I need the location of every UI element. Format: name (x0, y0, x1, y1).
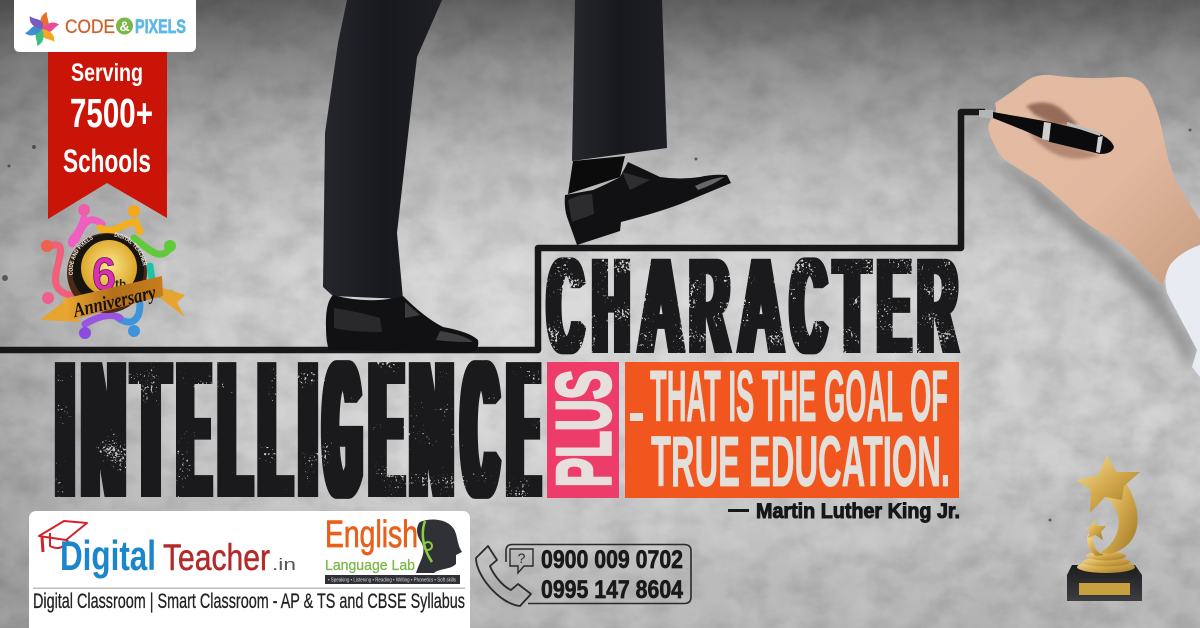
trophy base (1067, 565, 1142, 601)
wordmark Language Lab: Language Lab (325, 557, 415, 574)
hand holding pen (979, 75, 1200, 377)
numeral 6th: 6 (92, 248, 116, 300)
hand-drawn staircase line (0, 112, 985, 350)
ribbon: Serving 7500+ Schools: 7500+ (70, 90, 153, 136)
right shoe (565, 162, 731, 245)
figure heads (41, 204, 176, 339)
logo card: Code & Pixels (14, 0, 196, 52)
panel: PLUS pink block (542, 362, 627, 498)
wordmark Teacher: Teacher (163, 537, 270, 578)
gold banner (40, 288, 185, 322)
medallion (67, 233, 147, 313)
heading: CHARACTER: C (791, 230, 826, 383)
heading: CHARACTER: C (548, 230, 583, 383)
ampersand: & (119, 18, 130, 34)
businessman legs climbing the steps (323, 0, 731, 353)
right sock (568, 156, 625, 194)
big star (1076, 455, 1140, 513)
heading: INTELLIGENCE: I (300, 320, 316, 539)
trophy (1067, 455, 1142, 601)
heading: INTELLIGENCE: L (260, 320, 290, 539)
right trouser leg (572, 0, 667, 161)
numeral 6th: th (115, 277, 126, 291)
text: R (918, 230, 957, 383)
brand word PIXELS: PIXELS (135, 17, 186, 38)
icon: graduation cap (39, 521, 87, 552)
shirt cuff (1166, 245, 1200, 377)
icon: head with headset (416, 520, 462, 573)
badge: 6th anniversary (40, 204, 185, 339)
ring labels: DIGITAL TEACHER (114, 232, 147, 266)
heading: CHARACTER: H (593, 230, 629, 383)
panel: PLUS pink block: PLUS (542, 370, 627, 487)
heading: INTELLIGENCE: N (411, 320, 452, 539)
skills strip: • Speaking • Listening • Reading • Writing • Phonetics • Soft skills (328, 578, 456, 584)
pen (979, 110, 1114, 154)
pinwheel icon (24, 12, 60, 46)
ring labels: CODE AND PIXELS (68, 236, 93, 275)
divider (33, 588, 465, 589)
wordmark .in: .in (272, 555, 296, 574)
heading: CHARACTER: T (835, 230, 869, 383)
attribution: Martin Luther King Jr. (756, 500, 960, 523)
pedestal (1077, 552, 1135, 573)
heading: INTELLIGENCE: C (463, 320, 497, 539)
figure arms (50, 218, 170, 324)
text: E (509, 320, 538, 539)
small star (1085, 520, 1106, 540)
brand word CODE: CODE (65, 17, 115, 38)
icon: phone handset (476, 546, 531, 606)
heading: INTELLIGENCE: I (57, 320, 73, 539)
number box (512, 544, 691, 604)
heading: CHARACTER: A (739, 230, 783, 383)
heading: INTELLIGENCE: E (371, 320, 402, 539)
name plate (1079, 583, 1130, 595)
panel: orange quote block (625, 357, 959, 498)
heading: INTELLIGENCE (57, 320, 538, 539)
wordmark English: English (325, 514, 418, 556)
ribbon: Serving 7500+ Schools: Schools (63, 143, 151, 179)
tagline: Digital Classroom | Smart Classroom - AP & TS and CBSE Syllabus (33, 590, 465, 613)
banner text: Anniversary (70, 282, 158, 322)
ribbon: Serving 7500+ Schools: Serving (71, 59, 143, 87)
icon: question bubble: ? (518, 550, 526, 566)
ampersand (116, 18, 133, 34)
ribbon: Serving 7500+ Schools (48, 52, 167, 219)
heading: INTELLIGENCE: L (220, 320, 250, 539)
heading: CHARACTER: A (639, 230, 683, 383)
left trouser leg (323, 0, 442, 299)
panel: Digital Teacher and English Language Lab card (29, 511, 470, 628)
heading: CHARACTER (548, 230, 957, 383)
ring labels (68, 232, 147, 275)
heading: INTELLIGENCE: E (179, 320, 209, 539)
phone number 2: 0995 147 8604 (541, 576, 683, 604)
hand (988, 75, 1200, 285)
heading: CHARACTER: E (878, 230, 910, 383)
heading: INTELLIGENCE: T (134, 320, 168, 539)
hand shadow on wall (1000, 160, 1195, 372)
swoosh (1100, 476, 1138, 554)
phone number 1: 0900 009 0702 (541, 546, 683, 574)
dash mark (630, 413, 643, 421)
wordmark Digital: Digital (60, 532, 156, 579)
heading: CHARACTER: R (690, 230, 729, 383)
heading: INTELLIGENCE: N (83, 320, 124, 539)
skills strip (325, 575, 460, 584)
contact phone numbers (476, 544, 691, 606)
icon: question bubble (510, 549, 533, 573)
left shoe (326, 295, 478, 353)
heading: INTELLIGENCE: G (325, 320, 360, 539)
